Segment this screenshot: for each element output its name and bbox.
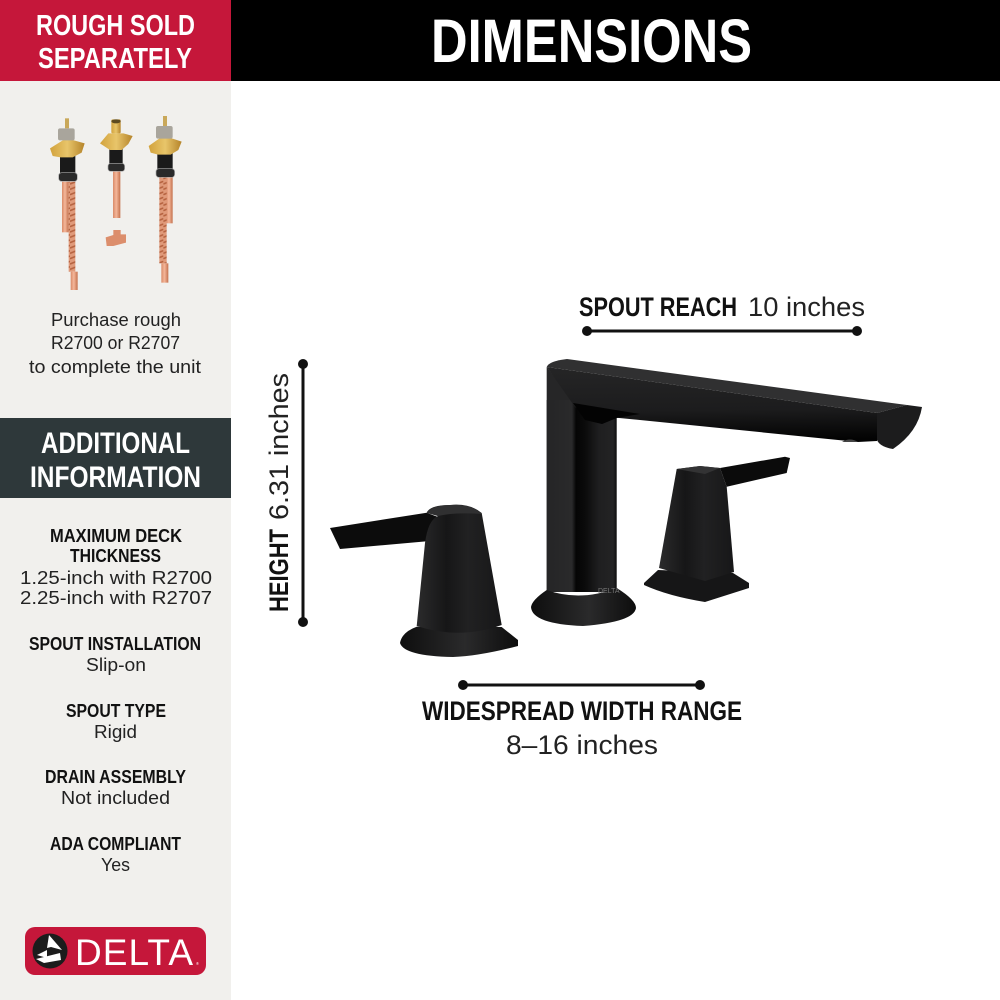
illustration: faucet spout	[531, 359, 922, 626]
spout base	[531, 588, 636, 626]
dimension: height: HEIGHT	[264, 529, 294, 612]
illustration: left handle	[330, 505, 518, 657]
dimension: height: 6.31 inches	[264, 373, 294, 520]
title banner: dimensions: DIMENSIONS	[431, 7, 752, 75]
logo: delta	[25, 927, 206, 975]
spec: spout type: SPOUT TYPE	[66, 701, 166, 721]
dimension: spout reach: SPOUT REACH	[579, 292, 737, 322]
arm top face	[547, 359, 907, 413]
column	[547, 367, 575, 590]
spec: spout type: Rigid	[94, 722, 137, 742]
dimension: height	[264, 359, 308, 627]
spec: drain assembly: Not included	[61, 788, 170, 808]
banner: additional information: INFORMATION	[30, 461, 201, 494]
dimension: widespread width range: WIDESPREAD WIDTH RANGE	[422, 696, 742, 726]
dimension: spout reach	[579, 292, 865, 336]
banner: additional information	[0, 418, 231, 498]
spec: maximum deck thickness	[20, 526, 212, 608]
spec: spout installation	[29, 634, 201, 675]
text: purchase rough note: R2700 or R2707	[51, 332, 180, 353]
arm front	[547, 367, 877, 442]
title banner: dimensions	[231, 0, 1000, 81]
spec: spout installation: Slip-on	[86, 655, 146, 675]
banner: rough sold separately: ROUGH SOLD	[36, 10, 195, 42]
banner: rough sold separately	[0, 0, 231, 81]
spec: maximum deck thickness: MAXIMUM DECK	[50, 526, 182, 546]
dimension: widespread width range: 8–16 inches	[506, 730, 658, 760]
left valve	[50, 118, 85, 290]
text: purchase rough note: to complete the unit	[29, 356, 201, 377]
dimension: widespread width range	[422, 680, 742, 760]
illustration: rough valve parts	[50, 116, 182, 290]
centre valve	[100, 119, 133, 218]
spec: maximum deck thickness: 1.25-inch with R2700	[20, 568, 212, 588]
sidebar background	[0, 0, 231, 1000]
spec: drain assembly: DRAIN ASSEMBLY	[45, 767, 186, 787]
dimension: spout reach: 10 inches	[748, 292, 865, 322]
illustration: faucet spout: DELTA	[598, 588, 620, 595]
spec: spout type	[66, 701, 166, 742]
copper tee	[106, 230, 126, 246]
banner: additional information: ADDITIONAL	[41, 427, 190, 460]
spec: ada compliant	[50, 834, 181, 875]
spec: maximum deck thickness: THICKNESS	[70, 546, 161, 566]
spec: ada compliant: Yes	[101, 855, 130, 875]
logo: delta: ®	[196, 961, 199, 966]
banner: rough sold separately: SEPARATELY	[38, 43, 192, 75]
spec: spout installation: SPOUT INSTALLATION	[29, 634, 201, 654]
text: purchase rough note	[29, 309, 201, 377]
text: purchase rough note: Purchase rough	[51, 309, 181, 330]
spec: maximum deck thickness: 2.25-inch with R2707	[20, 588, 212, 608]
right valve	[149, 116, 182, 283]
spec: drain assembly	[45, 767, 186, 808]
shadow under elbow	[573, 403, 640, 424]
illustration: right handle	[644, 457, 790, 602]
spout tip	[877, 405, 922, 449]
logo: delta: DELTA	[75, 932, 193, 973]
spec: ada compliant: ADA COMPLIANT	[50, 834, 181, 854]
